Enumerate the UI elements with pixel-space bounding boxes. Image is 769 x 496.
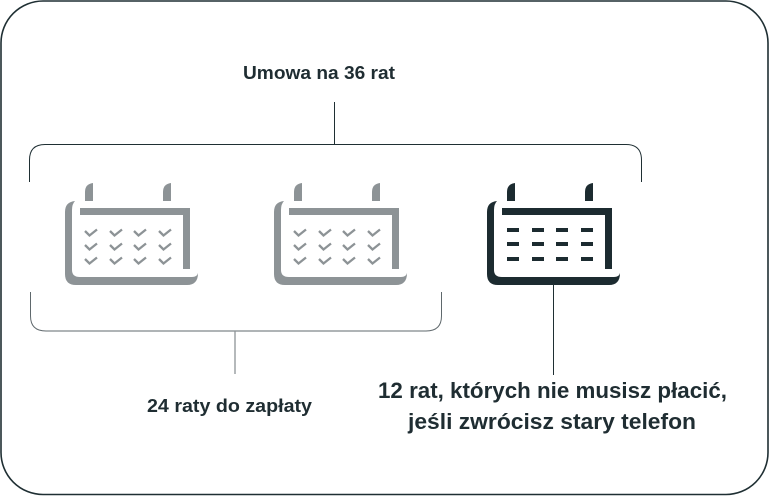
note: installments waived: 12 rat, których nie musisz płacić,	[378, 378, 727, 403]
note: installments waived	[378, 378, 727, 434]
icon: paid calendar 1	[65, 183, 198, 285]
top bracket spanning all calendars	[30, 102, 642, 182]
title: contract length: Umowa na 36 rat	[243, 62, 395, 83]
connector from free calendar to note	[552, 284, 554, 375]
label: installments to pay: 24 raty do zapłaty	[147, 395, 313, 416]
icon: free calendar	[487, 183, 620, 285]
icon: paid calendar 2	[274, 183, 407, 285]
bottom bracket under paid calendars	[30, 292, 442, 374]
note: installments waived: jeśli zwrócisz stary telefon	[407, 409, 696, 434]
